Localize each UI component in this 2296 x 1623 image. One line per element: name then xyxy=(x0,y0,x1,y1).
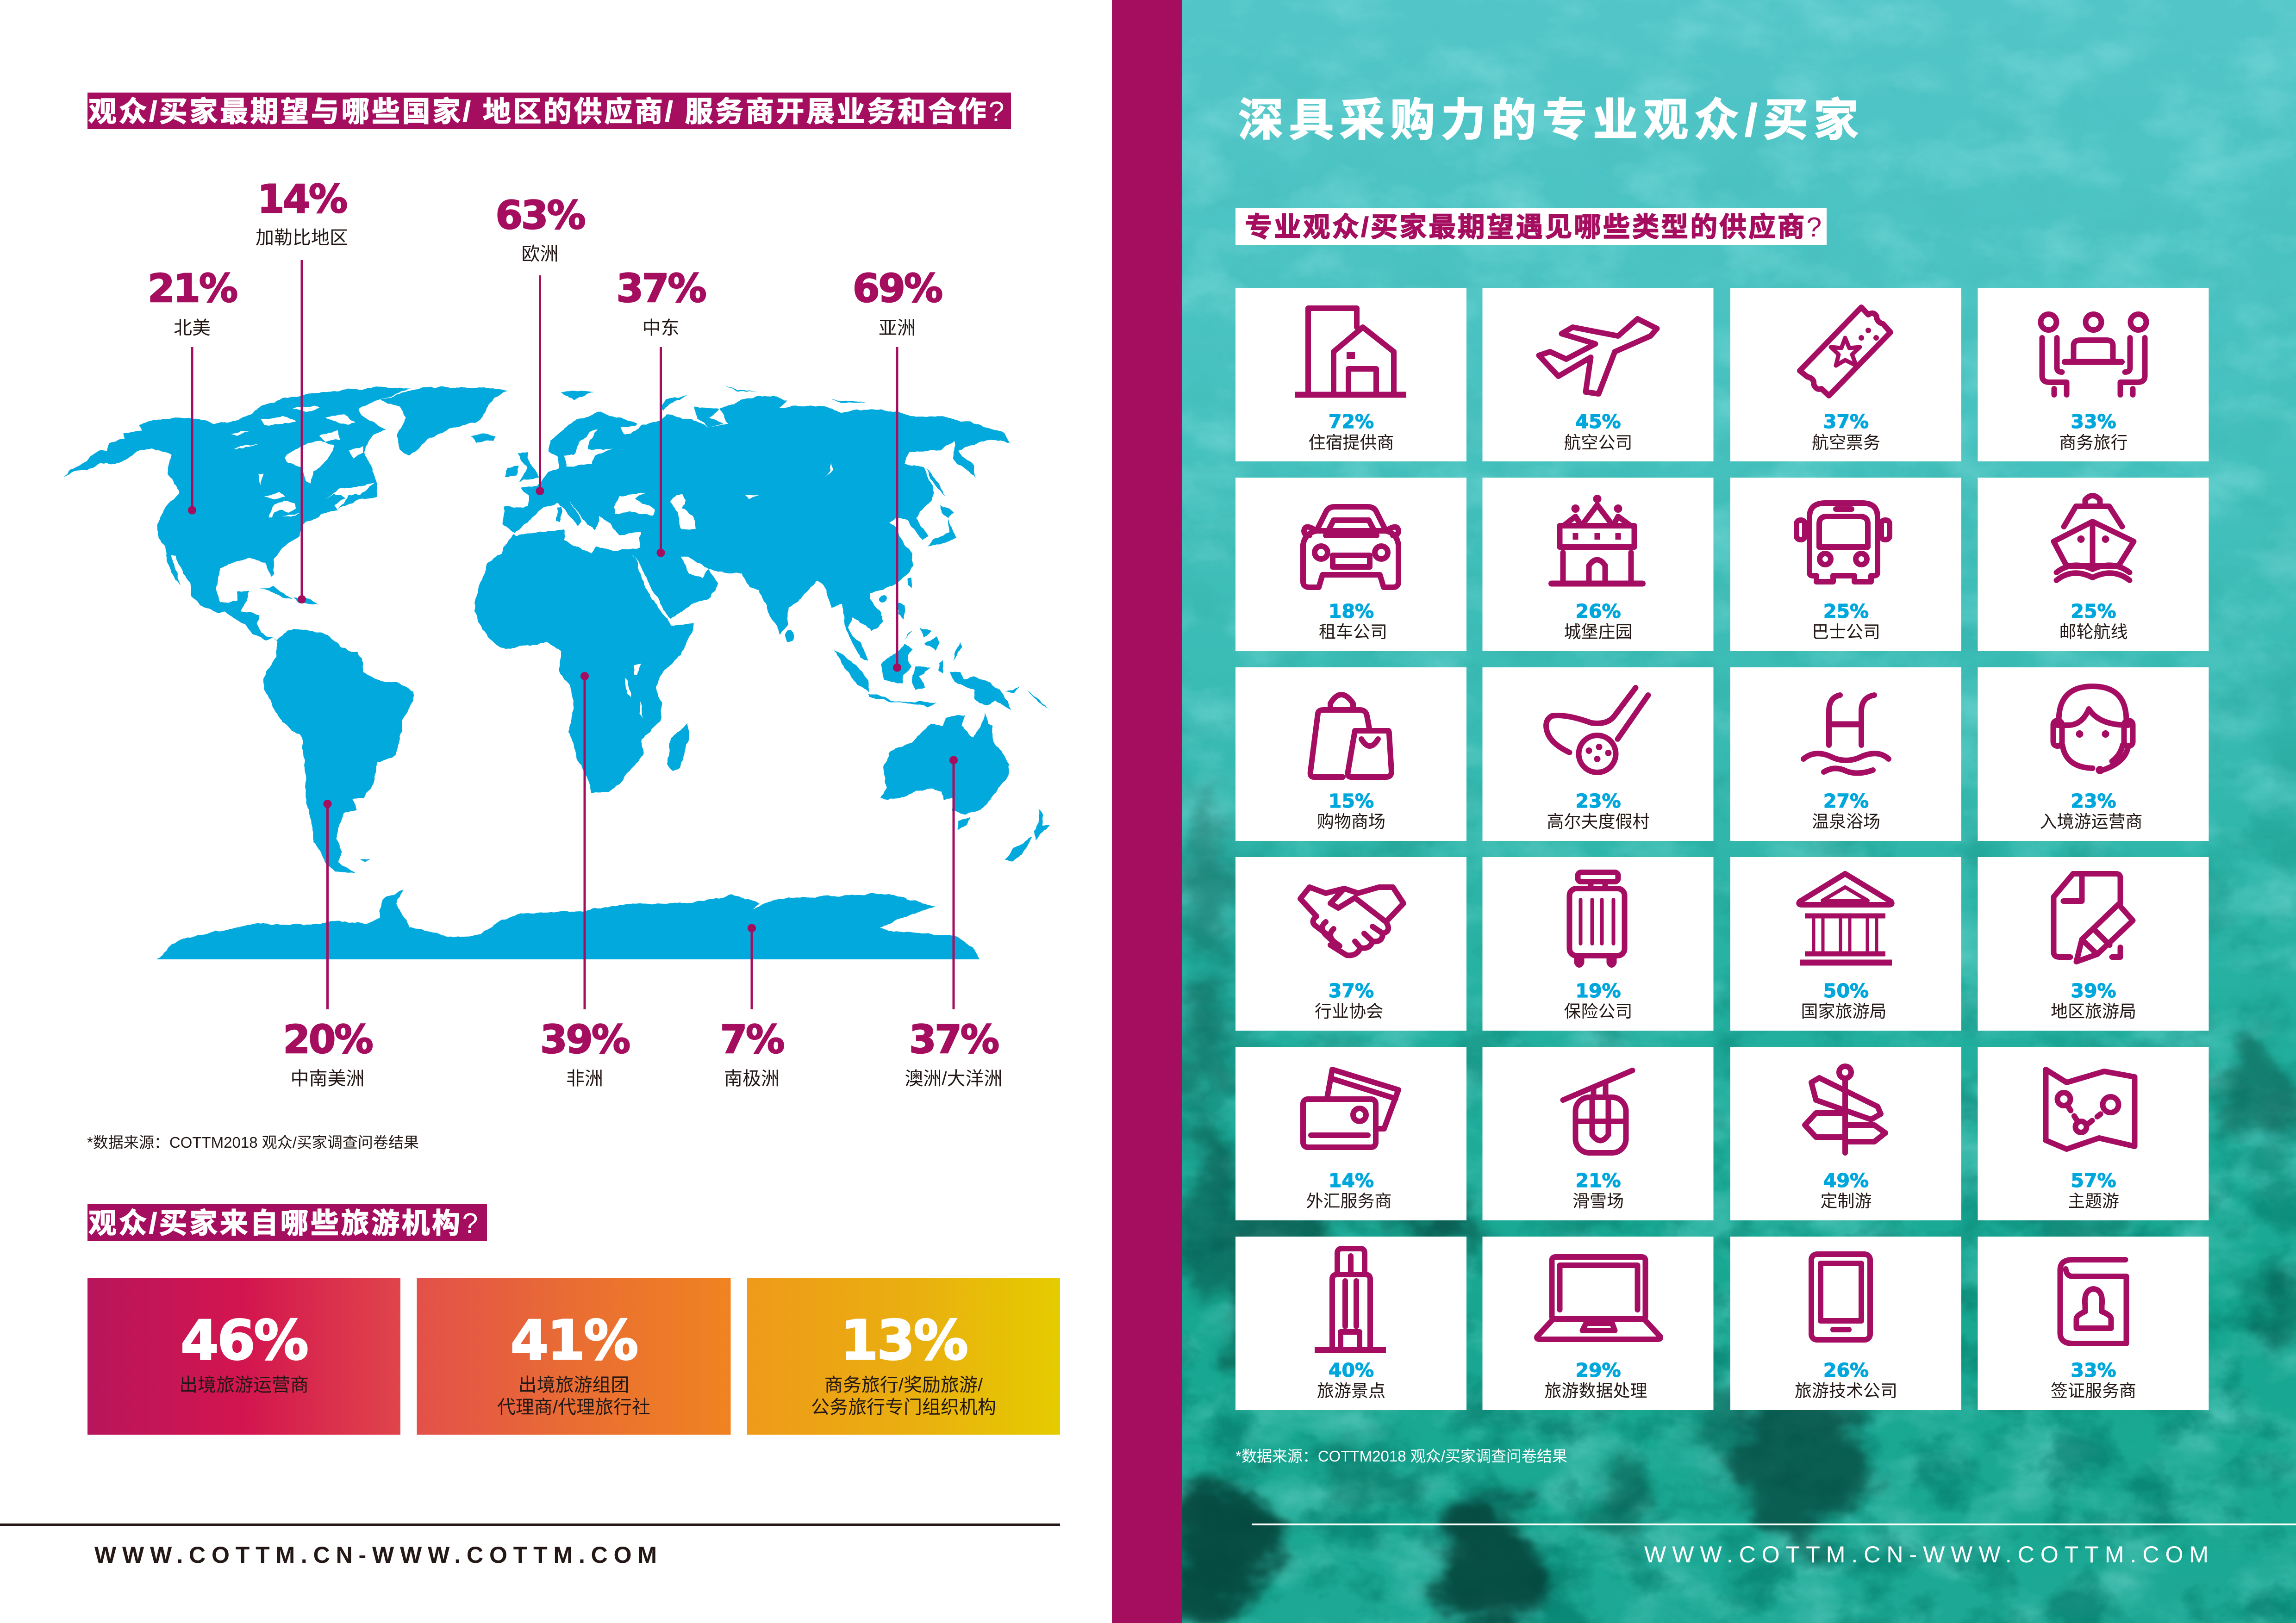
icon: plane xyxy=(1539,319,1657,394)
card: attractions xyxy=(1235,1237,1466,1410)
label: 外汇服务商 xyxy=(1306,1192,1391,1211)
heading: preferred regions: 观众/买家最期望与哪些国家/ 地区的供应商/ 服务商开展业务和合作? xyxy=(88,96,1006,127)
label: 城堡庄园 xyxy=(1564,622,1632,641)
icon: credit cards xyxy=(1303,1070,1398,1147)
icon: ship xyxy=(2053,496,2134,580)
callout: 39% Africa: 非洲 xyxy=(566,1069,603,1089)
percent: 40% xyxy=(1329,1359,1374,1381)
card: car rental xyxy=(1235,478,1466,651)
stat box: 13%: 13% xyxy=(840,1308,967,1372)
label: 地区旅游局 xyxy=(2051,1002,2136,1021)
callout: 14% Caribbean: 14% xyxy=(257,176,347,222)
percent: 33% xyxy=(2071,410,2116,433)
icon: ticket xyxy=(1800,307,1890,396)
purple vertical band xyxy=(1112,0,1182,1623)
card: air tickets xyxy=(1730,288,1961,461)
percent: 72% xyxy=(1329,410,1374,433)
callout: 63% Europe: 欧洲 xyxy=(521,244,558,264)
card: bus xyxy=(1730,478,1961,651)
heading: supplier types: 专业观众/买家最期望遇见哪些类型的供应商? xyxy=(1245,212,1823,243)
icon: golf club xyxy=(1546,688,1648,772)
stat box: 13%: 商务旅行/奖励旅游/ xyxy=(824,1375,983,1395)
percent: 33% xyxy=(2071,1359,2116,1381)
stat box: 46% xyxy=(87,1278,400,1435)
label: 旅游数据处理 xyxy=(1544,1381,1647,1400)
callout: 37% Oceania xyxy=(905,756,1003,1089)
card: ski resort xyxy=(1482,1047,1714,1220)
card: shopping xyxy=(1235,667,1466,841)
percent: 27% xyxy=(1823,790,1869,812)
icon: tablet xyxy=(1811,1254,1870,1340)
callout: 21% North America xyxy=(148,266,237,515)
icon: suitcase xyxy=(1569,872,1625,965)
icon: car xyxy=(1303,507,1398,587)
label: 保险公司 xyxy=(1564,1002,1632,1021)
callout: 37% Middle East: 中东 xyxy=(643,318,680,338)
percent: 23% xyxy=(1575,790,1621,812)
stat box: 13%: 公务旅行专门组织机构 xyxy=(811,1397,996,1418)
callout: 63% Europe: 63% xyxy=(495,193,585,238)
percent: 39% xyxy=(2071,980,2116,1002)
heading: travel organisations: 观众/买家来自哪些旅游机构? xyxy=(88,1207,480,1239)
stat box: 41%: 出境旅游组团 xyxy=(518,1375,630,1395)
label: 旅游技术公司 xyxy=(1795,1381,1897,1400)
callout: 37% Oceania: 澳洲/大洋洲 xyxy=(905,1069,1003,1089)
card: insurance xyxy=(1482,857,1714,1031)
callout: 37% Oceania: 37% xyxy=(909,1017,998,1062)
percent: 45% xyxy=(1575,410,1621,433)
footnote: left data source: *数据来源：COTTM2018 观众/买家调查问卷结果 xyxy=(87,1134,419,1151)
callout: 7% Antarctica xyxy=(720,924,784,1089)
icon: laptop xyxy=(1537,1257,1660,1339)
callout: 20% Central and South America xyxy=(283,800,372,1089)
callout: 39% Africa: 39% xyxy=(540,1017,630,1062)
icon: bus xyxy=(1797,503,1890,582)
stat box: 41%: 41% xyxy=(511,1308,637,1372)
world map xyxy=(63,386,1050,978)
label: 国家旅游局 xyxy=(1801,1002,1887,1021)
icon: building and house xyxy=(1295,308,1406,395)
card: travel data xyxy=(1482,1237,1714,1410)
icon: pool ladder xyxy=(1803,695,1889,773)
footer: left web address: WWW.COTTM.CN-WWW.COTTM.COM xyxy=(94,1542,657,1568)
card: associations xyxy=(1235,857,1466,1031)
callout: 69% Asia xyxy=(853,266,942,672)
card: hotel xyxy=(1235,288,1466,461)
percent: 57% xyxy=(2071,1169,2116,1192)
panel: sea photo background xyxy=(1171,0,2296,1623)
label: 租车公司 xyxy=(1319,622,1387,641)
icon: headset agent xyxy=(2053,686,2133,774)
icon: passport xyxy=(2060,1260,2127,1343)
percent: 18% xyxy=(1329,600,1374,622)
callout: 63% Europe xyxy=(495,193,585,495)
label: 行业协会 xyxy=(1315,1002,1383,1021)
card: travel technology xyxy=(1730,1237,1961,1410)
percent: 50% xyxy=(1823,980,1869,1002)
stat box: 13% xyxy=(747,1278,1060,1435)
card: visa services xyxy=(1978,1237,2209,1410)
card: spa xyxy=(1730,667,1961,841)
icon: bags xyxy=(1310,695,1391,777)
callout: 21% North America: 北美 xyxy=(174,318,211,338)
label: 航空公司 xyxy=(1564,433,1632,452)
card: golf resort xyxy=(1482,667,1714,841)
callout: 37% Middle East: 37% xyxy=(616,266,705,311)
title: buyers with purchasing power: 深具采购力的专业观众/买家 xyxy=(1238,95,1859,145)
icon: handshake xyxy=(1300,887,1404,955)
icon: signpost xyxy=(1805,1066,1885,1153)
card: national tourism office xyxy=(1730,857,1961,1031)
label: 航空票务 xyxy=(1812,433,1880,452)
label: 入境游运营商 xyxy=(2040,812,2142,831)
card: airlines xyxy=(1482,288,1714,461)
callout: 14% Caribbean xyxy=(256,176,348,603)
label: 巴士公司 xyxy=(1812,622,1880,641)
footnote: right data source: *数据来源：COTTM2018 观众/买家调查问卷结果 xyxy=(1235,1448,1567,1465)
card: foreign exchange xyxy=(1235,1047,1466,1220)
icon: castle xyxy=(1552,495,1642,584)
label: 住宿提供商 xyxy=(1308,433,1394,452)
percent: 49% xyxy=(1823,1169,1869,1192)
callout: 7% Antarctica: 南极洲 xyxy=(724,1069,780,1089)
percent: 26% xyxy=(1575,600,1621,622)
callout: 7% Antarctica: 7% xyxy=(720,1017,784,1062)
card: business travel xyxy=(1978,288,2209,461)
percent: 29% xyxy=(1575,1359,1621,1381)
callout: 39% Africa xyxy=(540,672,630,1089)
card: cruise xyxy=(1978,478,2209,651)
icon: cable car xyxy=(1563,1070,1632,1153)
icon: meeting xyxy=(2040,314,2146,395)
percent: 25% xyxy=(2071,600,2116,622)
label: 购物商场 xyxy=(1317,812,1385,831)
icon: route map xyxy=(2046,1070,2135,1149)
icon: tower xyxy=(1315,1249,1386,1350)
label: 滑雪场 xyxy=(1572,1192,1624,1211)
callout: 69% Asia: 69% xyxy=(853,266,942,311)
percent: 14% xyxy=(1329,1169,1374,1192)
card: themed tours xyxy=(1978,1047,2209,1220)
percent: 37% xyxy=(1823,410,1869,433)
callout: 69% Asia: 亚洲 xyxy=(879,318,916,338)
percent: 23% xyxy=(2071,790,2116,812)
label: 签证服务商 xyxy=(2051,1381,2136,1400)
stat box: 41%: 代理商/代理旅行社 xyxy=(497,1397,650,1418)
callout: 20% Central and South America: 20% xyxy=(283,1017,372,1062)
percent: 37% xyxy=(1329,980,1374,1002)
percent: 19% xyxy=(1575,980,1621,1002)
stat box: 46%: 46% xyxy=(181,1308,307,1372)
label: 高尔夫度假村 xyxy=(1547,812,1650,831)
percent: 15% xyxy=(1329,790,1374,812)
callout: 20% Central and South America: 中南美洲 xyxy=(291,1069,365,1089)
stat box: 46%: 出境旅游运营商 xyxy=(179,1375,309,1395)
stat box: 41% xyxy=(417,1278,730,1435)
card: customised tours xyxy=(1730,1047,1961,1220)
icon: museum xyxy=(1799,874,1892,963)
percent: 25% xyxy=(1823,600,1869,622)
callout: 37% Middle East xyxy=(616,266,705,557)
card: regional tourism office xyxy=(1978,857,2209,1031)
label: 商务旅行 xyxy=(2059,433,2128,452)
percent: 21% xyxy=(1575,1169,1621,1192)
label: 邮轮航线 xyxy=(2059,622,2128,641)
card: inbound operator xyxy=(1978,667,2209,841)
callout: 21% North America: 21% xyxy=(148,266,237,311)
callout: 14% Caribbean: 加勒比地区 xyxy=(256,228,348,248)
label: 旅游景点 xyxy=(1317,1381,1385,1400)
percent: 26% xyxy=(1823,1359,1869,1381)
label: 温泉浴场 xyxy=(1812,812,1880,831)
footer: right web address: WWW.COTTM.CN-WWW.COTTM.COM xyxy=(1644,1542,2209,1567)
label: 定制游 xyxy=(1820,1192,1872,1211)
icon: document and pencil xyxy=(2053,874,2133,962)
card: castle xyxy=(1482,478,1714,651)
label: 主题游 xyxy=(2068,1192,2119,1211)
